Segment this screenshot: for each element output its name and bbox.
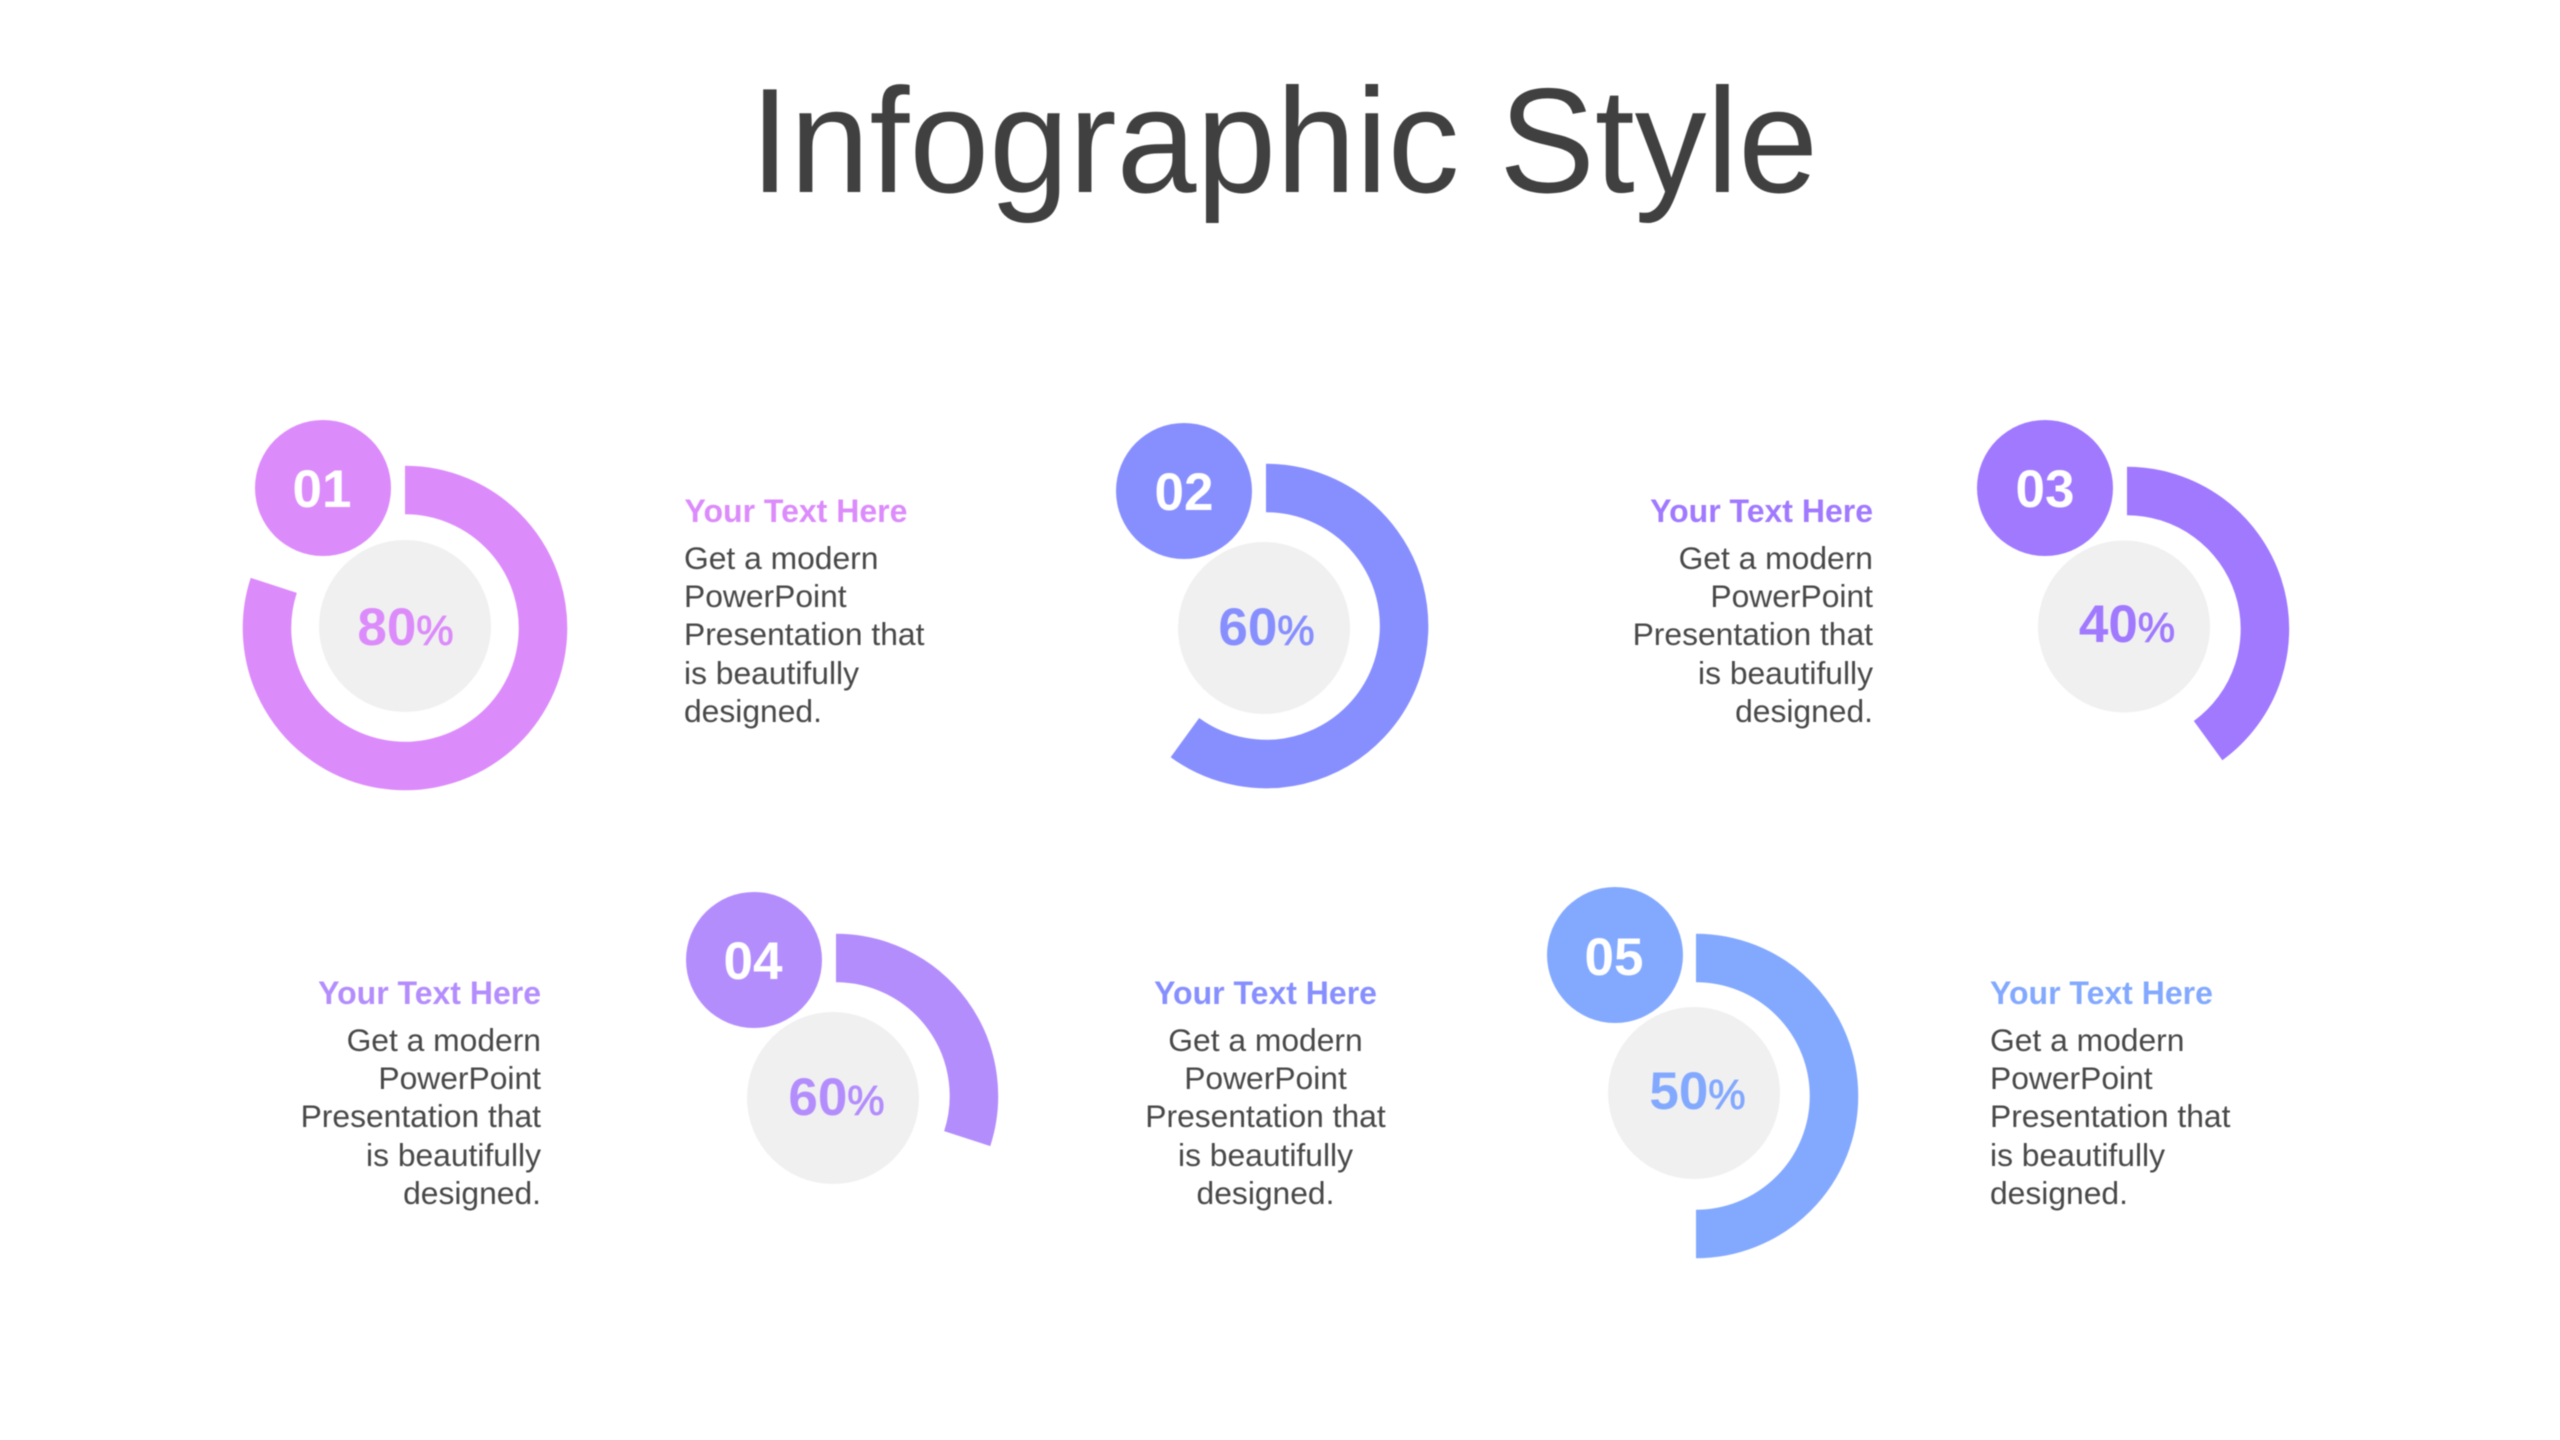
ring arc 04 [836,958,974,1139]
text block 01 [684,493,925,729]
donut 04: 60% [686,892,974,1184]
heading 01: Your Text Here [684,493,907,529]
badge 02 [1116,423,1252,559]
donut 03: 40% [1977,420,2265,741]
body center: is beautifully [1178,1137,1353,1173]
badge 05 [1547,887,1683,1023]
text block 05 [1990,975,2231,1211]
percentage 40: 40% [2079,595,2175,654]
body 01: is beautifully [684,655,859,691]
body 01: Get a modern [684,540,878,576]
body 05: designed. [1990,1175,2128,1211]
heading 05: Your Text Here [1990,975,2213,1011]
percentage 50: 50% [1649,1062,1746,1121]
body 05: Get a modern [1990,1022,2184,1058]
percentage 60: 60% [1218,598,1315,657]
donut 01: 80% [255,420,543,766]
body 03: Get a modern [1679,540,1873,576]
center disc 02 [1178,542,1350,714]
center disc 01 [319,540,491,712]
heading 03: Your Text Here [1650,493,1873,529]
body center: PowerPoint [1184,1060,1347,1096]
body 04: Get a modern [347,1022,541,1058]
body 01: PowerPoint [684,578,847,614]
body 04: designed. [403,1175,541,1211]
heading center: Your Text Here [1154,975,1377,1011]
ring arc 03 [2127,491,2265,741]
body 01: designed. [684,693,822,729]
body 04: PowerPoint [378,1060,541,1096]
body 03: is beautifully [1698,655,1873,691]
center disc 03 [2038,540,2210,712]
donut 02: 60% [1116,423,1404,764]
heading 04: Your Text Here [318,975,541,1011]
title: Infographic Style [750,58,1818,225]
text block center [1145,975,1386,1211]
body 04: Presentation that [301,1098,541,1134]
body 05: is beautifully [1990,1137,2165,1173]
body 05: Presentation that [1990,1098,2231,1134]
body center: designed. [1197,1175,1334,1211]
body 03: Presentation that [1633,616,1873,652]
percentage 60: 60% [788,1068,885,1127]
badge number 03: 03 [2016,460,2074,519]
badge number 04: 04 [724,932,783,991]
body 03: designed. [1735,693,1873,729]
text block 04 [301,975,541,1211]
ring arc 05 [1696,958,1834,1234]
body 03: PowerPoint [1710,578,1873,614]
body 01: Presentation that [684,616,925,652]
body center: Presentation that [1145,1098,1386,1134]
badge number 05: 05 [1585,928,1643,987]
badge 01 [255,420,391,556]
badge 04 [686,892,822,1028]
body 04: is beautifully [366,1137,541,1173]
ring arc 02 [1185,488,1404,764]
donut 05: 50% [1547,887,1834,1234]
center disc 05 [1608,1007,1780,1179]
body 05: PowerPoint [1990,1060,2153,1096]
center disc 04 [747,1012,919,1184]
badge 03 [1977,420,2113,556]
ring arc 01 [267,490,543,766]
percentage 80: 80% [357,598,454,657]
body center: Get a modern [1168,1022,1363,1058]
badge number 02: 02 [1155,463,1213,522]
badge number 01: 01 [293,460,351,519]
text block 03 [1633,493,1873,729]
